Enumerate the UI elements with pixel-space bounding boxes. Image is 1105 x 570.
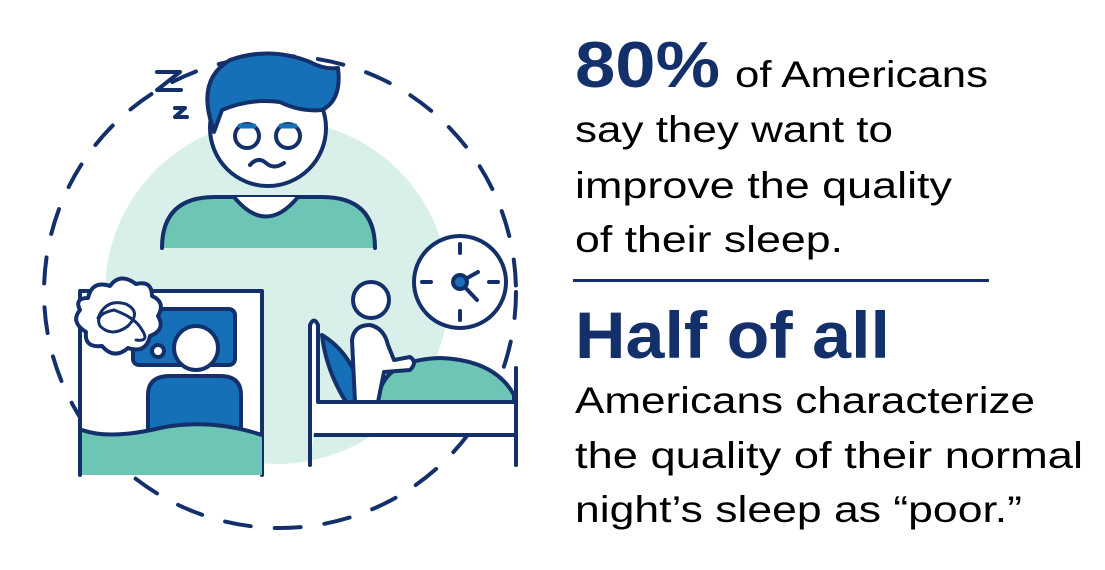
text block: 80% statistic: 80%: [575, 28, 720, 101]
background light circle: [105, 120, 449, 464]
dashed circle: [44, 56, 516, 528]
text block: half of all: Americans characterize: [575, 380, 1035, 421]
text block: 80% statistic: improve the quality: [575, 165, 953, 206]
text block: half of all: night’s sleep as “poor.”: [575, 489, 1022, 530]
icon: clock: [414, 236, 506, 328]
text block: half of all: the quality of their normal: [575, 435, 1083, 476]
icon: left bed with sleepless person: [76, 278, 262, 475]
text block: 80% statistic: of their sleep.: [575, 219, 843, 260]
text block: 80% statistic: [575, 28, 988, 260]
text block: 80% statistic: say they want to: [575, 109, 893, 150]
illustration: sleep scene: [44, 53, 516, 528]
text block: 80% statistic: of Americans: [735, 54, 988, 95]
icon: zzz: [157, 72, 187, 117]
text block: half of all: Half of all: [575, 298, 890, 372]
icon: right bed with sitting person: [310, 282, 516, 465]
icon: tired man: [162, 53, 375, 248]
text block: half of all: [575, 298, 1083, 530]
